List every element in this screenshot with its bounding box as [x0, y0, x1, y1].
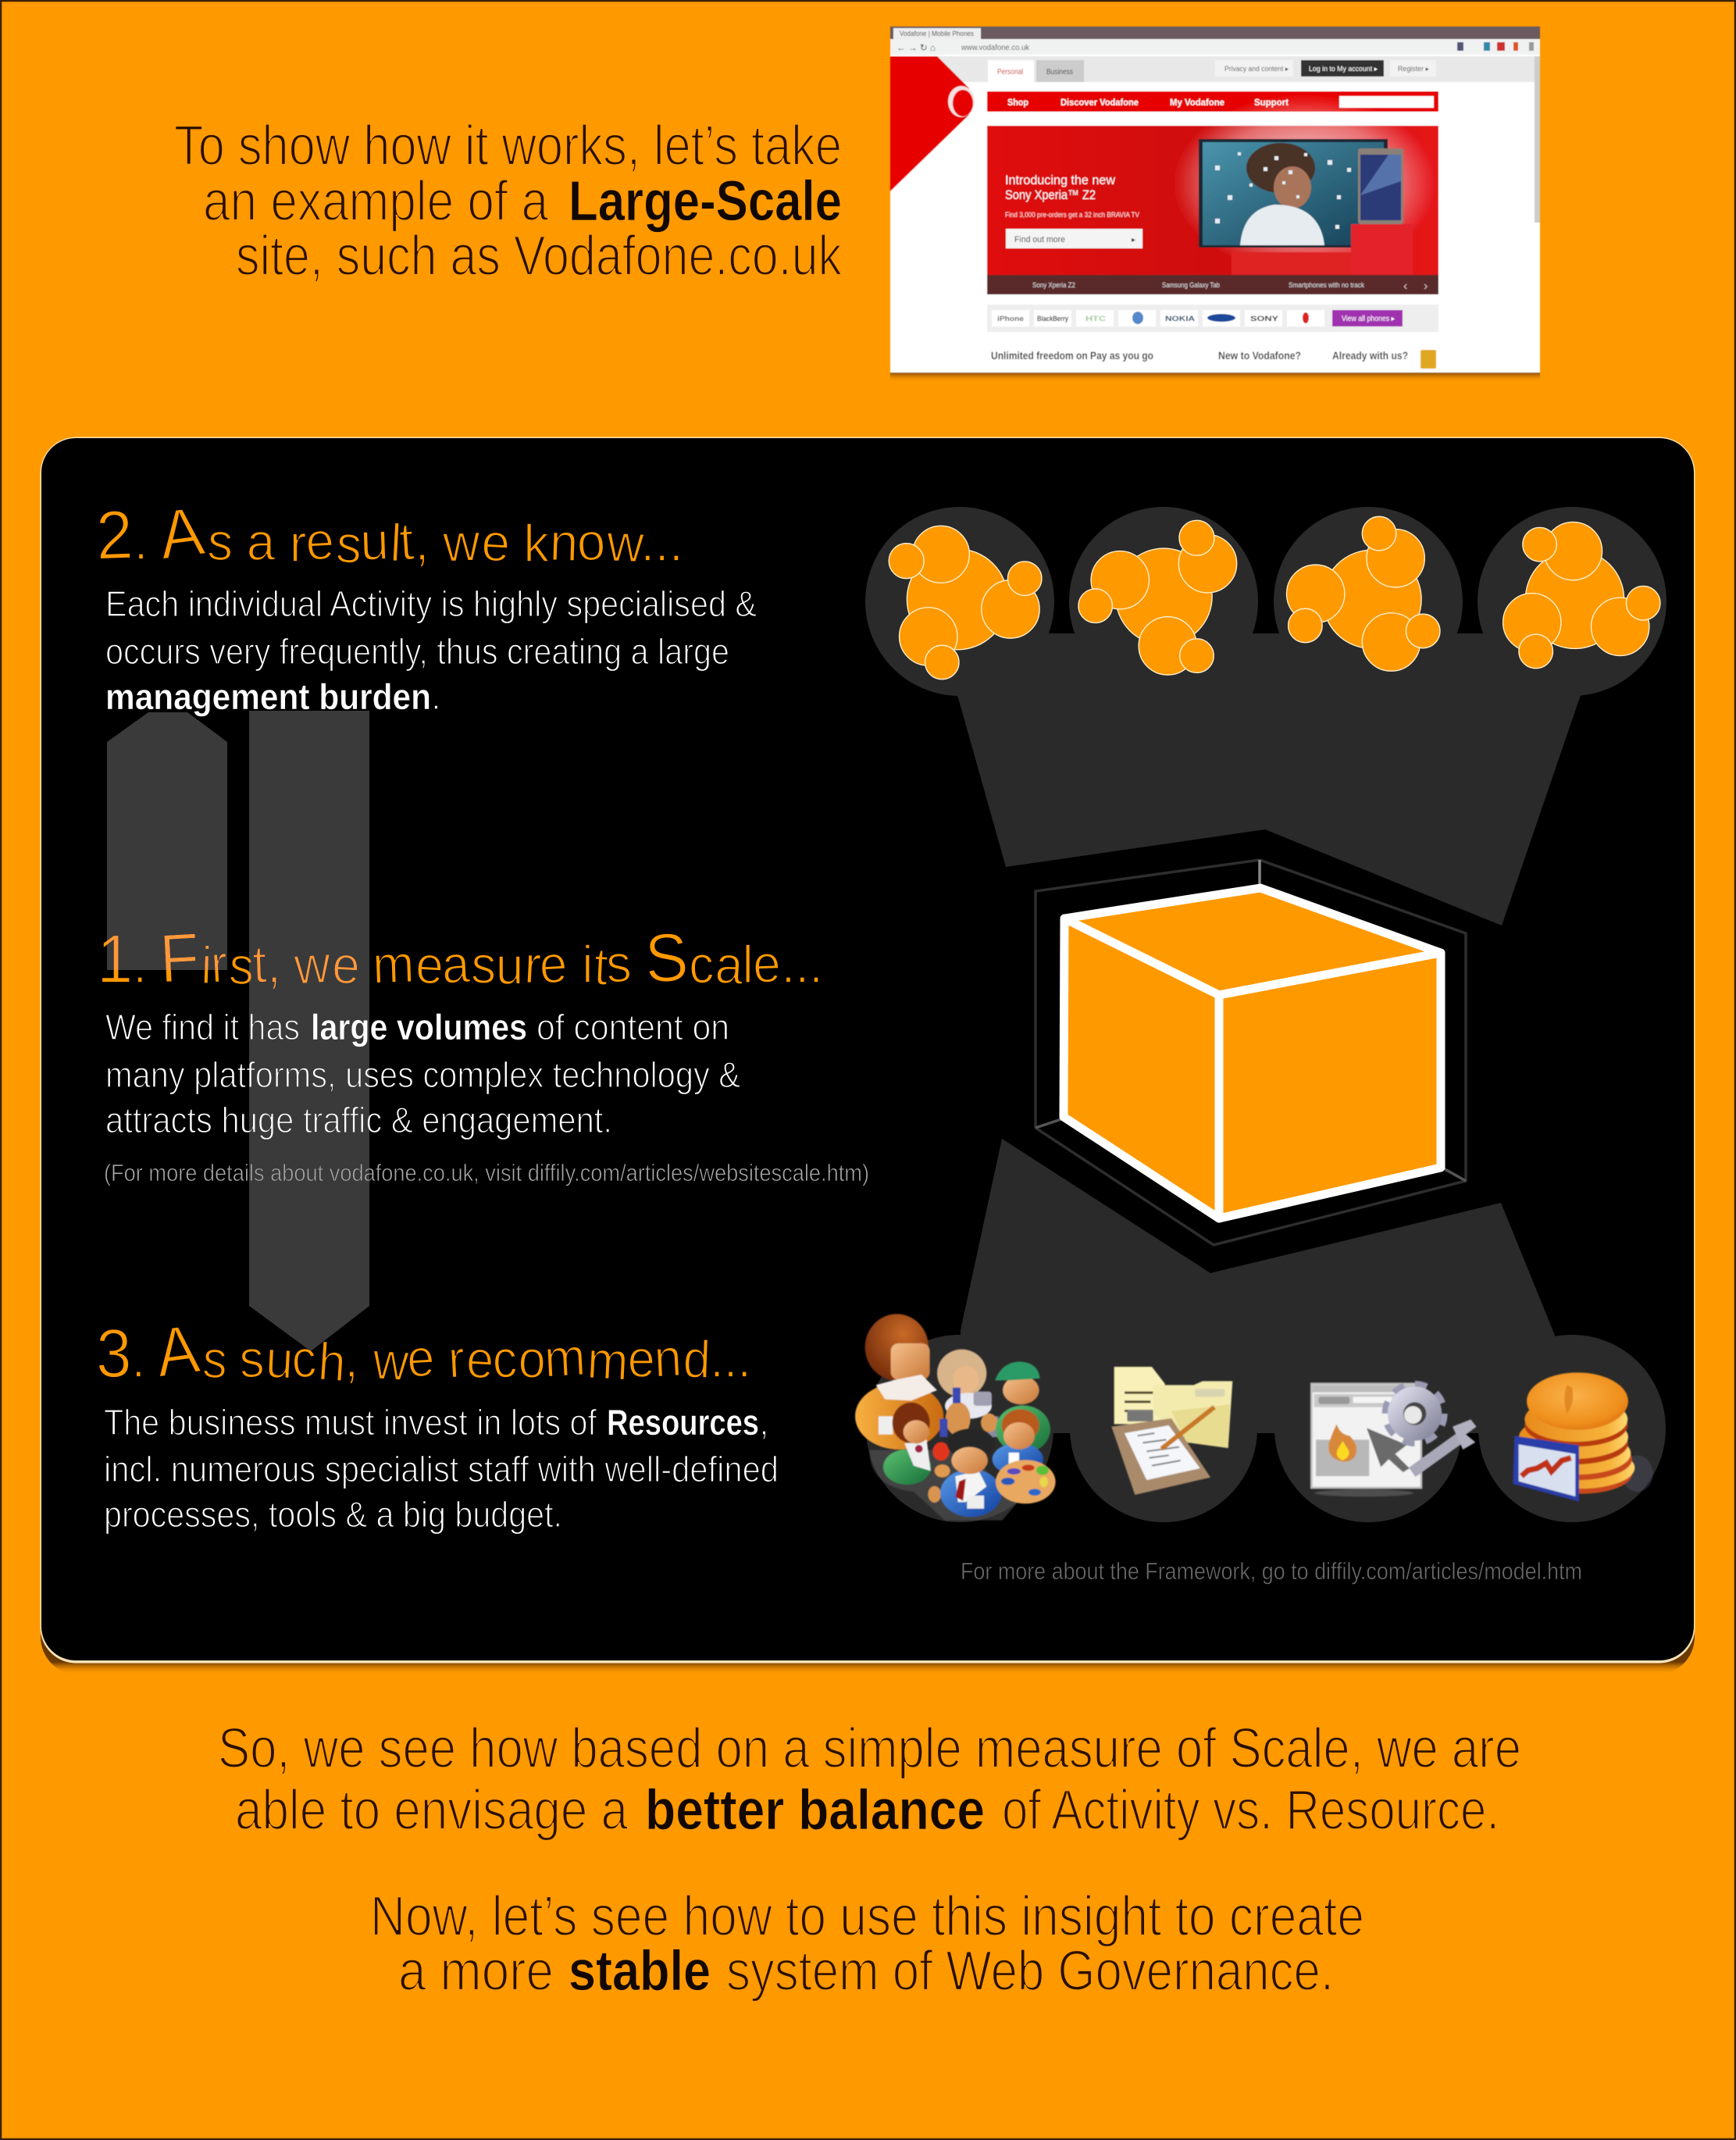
intro text: an example of a — [203, 170, 549, 233]
intro text: To show how it works, let’s take — [174, 115, 842, 177]
cube outer shell — [1036, 860, 1466, 1245]
phone brands bar: NOKIA — [1165, 315, 1196, 323]
next step text: a more — [398, 1940, 554, 2003]
man with green cap — [995, 1361, 1050, 1453]
hero carousel strip: › — [1424, 280, 1428, 293]
phone brands bar: SONY — [1250, 315, 1278, 323]
site navigation bar: My Vodafone — [1170, 97, 1224, 108]
paint and brush — [928, 1442, 950, 1503]
section 1 body: of content on — [536, 1007, 729, 1047]
hero carousel strip: Smartphones with no track — [1289, 281, 1364, 289]
activity blob 3 — [1287, 516, 1440, 671]
phone brands bar: HTC — [1085, 315, 1107, 323]
phone brands bar: BlackBerry — [1037, 315, 1068, 323]
section 1 note: (For more details about vodafone.co.uk, visit diffily.com/articles/websitescale.htm) — [104, 1159, 869, 1186]
browser toolbar — [890, 39, 1540, 55]
section 1 heading: 1. First, we measure its Scale... — [97, 918, 823, 997]
intro text — [174, 115, 843, 287]
icon: folder and clipboard — [1111, 1367, 1232, 1495]
section 2 body: . — [431, 676, 441, 717]
activity blob 4 — [1503, 522, 1660, 669]
floor reflection — [869, 1450, 1018, 1521]
man in blue suit — [940, 1428, 1002, 1517]
hero text: Find 3,000 pre-orders get a 32 inch BRAVIA TV — [1005, 211, 1139, 219]
activity blob 2 — [1078, 520, 1237, 675]
browser tab — [893, 28, 981, 39]
site top strip: Personal — [997, 68, 1023, 77]
vodafone logo — [948, 86, 975, 117]
section 3 heading: 3. As such, we recommend... — [96, 1310, 751, 1393]
conclusion text: able to envisage a — [235, 1779, 629, 1842]
conclusion text — [218, 1717, 1521, 1842]
next step text: stable — [569, 1940, 711, 2003]
site lower headings — [991, 349, 1436, 369]
woman in green — [883, 1403, 931, 1485]
hero carousel strip: ‹ — [1403, 280, 1407, 293]
section 3 body — [104, 1402, 779, 1535]
section 3 body: The business must invest in lots of — [104, 1402, 597, 1443]
activity blob 1 — [889, 526, 1042, 679]
tools in hand — [939, 1388, 998, 1437]
activity funnel — [865, 507, 1666, 926]
woman in orange — [855, 1314, 943, 1450]
section 2 body — [105, 583, 757, 717]
hero carousel strip: Sony Xperia Z2 — [1032, 281, 1075, 289]
site navigation bar: Discover Vodafone — [1060, 97, 1139, 108]
browser title bar — [890, 27, 1540, 39]
section 1 body: large volumes — [311, 1007, 527, 1047]
main black panel — [41, 437, 1695, 1675]
section 2 body: occurs very frequently, thus creating a large — [105, 631, 729, 672]
site top strip: Log in to My account ▸ — [1309, 65, 1378, 73]
section 3 body: , — [759, 1402, 769, 1443]
section 1 body: many platforms, uses complex technology & — [105, 1054, 740, 1095]
scale cube — [1064, 888, 1441, 1218]
section 1 body — [105, 1007, 740, 1140]
intro text: site, such as Vodafone.co.uk — [236, 225, 843, 287]
site top strip: Privacy and content ▸ — [1224, 65, 1289, 73]
conclusion text: better balance — [645, 1779, 985, 1842]
next step text: system of Web Governance. — [726, 1940, 1334, 2003]
artist palette — [996, 1460, 1056, 1503]
icon: browser, gear and wrench — [1311, 1384, 1477, 1496]
hero text — [1005, 173, 1139, 219]
site lower headings: New to Vodafone? — [1218, 349, 1301, 362]
next step text: Now, let’s see how to use this insight to create — [370, 1885, 1364, 1948]
browser toolbar: www.vodafone.co.uk — [961, 44, 1030, 52]
conclusion text: of Activity vs. Resource. — [1002, 1779, 1499, 1842]
section 1 body: We find it has — [105, 1007, 300, 1047]
hero text: Sony Xperia™ Z2 — [1005, 187, 1096, 202]
arrow up (activity) — [107, 712, 227, 970]
boy with palette body — [993, 1409, 1043, 1475]
phone brands bar: View all phones ▸ — [1342, 315, 1395, 323]
section 2 body: Each individual Activity is highly specialised & — [105, 583, 757, 624]
red logo shape — [890, 56, 969, 191]
section 1 body: attracts huge traffic & engagement. — [105, 1100, 612, 1140]
icon: coins and chart — [1513, 1372, 1653, 1502]
hero button — [1006, 229, 1142, 248]
site navigation bar: Shop — [1007, 97, 1028, 108]
browser scrollbar — [1535, 56, 1540, 223]
browser screenshot of vodafone.co.uk — [890, 27, 1540, 382]
section 3 body: Resources — [607, 1402, 759, 1443]
site top strip: Business — [1046, 68, 1073, 77]
section 3 body: processes, tools & a big budget. — [104, 1494, 562, 1535]
conclusion text: So, we see how based on a simple measure of Scale, we are — [218, 1717, 1521, 1780]
site navigation bar: Support — [1254, 97, 1289, 108]
icon: staff group — [855, 1314, 1056, 1521]
site top strip — [890, 56, 1535, 82]
hero carousel strip: Samsung Galaxy Tab — [1162, 281, 1220, 289]
hero TV — [1199, 139, 1388, 248]
site lower headings: Already with us? — [1332, 349, 1408, 362]
hero button: ▸ — [1132, 236, 1135, 244]
site navigation bar — [987, 91, 1438, 112]
hero carousel strip — [987, 275, 1438, 294]
browser toolbar: ← → ↻ ⌂ — [897, 42, 936, 53]
hero phone and stands — [1232, 148, 1413, 275]
blond woman — [937, 1350, 992, 1419]
resource funnel — [866, 1139, 1666, 1522]
site top strip: Register ▸ — [1398, 65, 1429, 73]
phone brands bar — [987, 305, 1438, 332]
arrow down (resources) — [249, 711, 369, 1351]
section 2 heading: 2. As a result, we know... — [94, 492, 683, 575]
next step text — [370, 1885, 1364, 2003]
intro text: Large-Scale — [569, 170, 842, 233]
section 2 body: management burden — [105, 676, 431, 717]
phone brands bar: iPhone — [997, 315, 1024, 323]
section 3 body: incl. numerous specialist staff with well-defined — [104, 1449, 779, 1489]
browser tab: Vodafone | Mobile Phones — [900, 30, 974, 37]
framework footnote: For more about the Framework, go to diffily.com/articles/model.htm — [961, 1557, 1582, 1585]
site lower headings: Unlimited freedom on Pay as you go — [991, 349, 1153, 362]
hero text: Introducing the new — [1005, 173, 1116, 187]
hero banner — [987, 94, 1438, 294]
hero button: Find out more — [1014, 235, 1065, 244]
